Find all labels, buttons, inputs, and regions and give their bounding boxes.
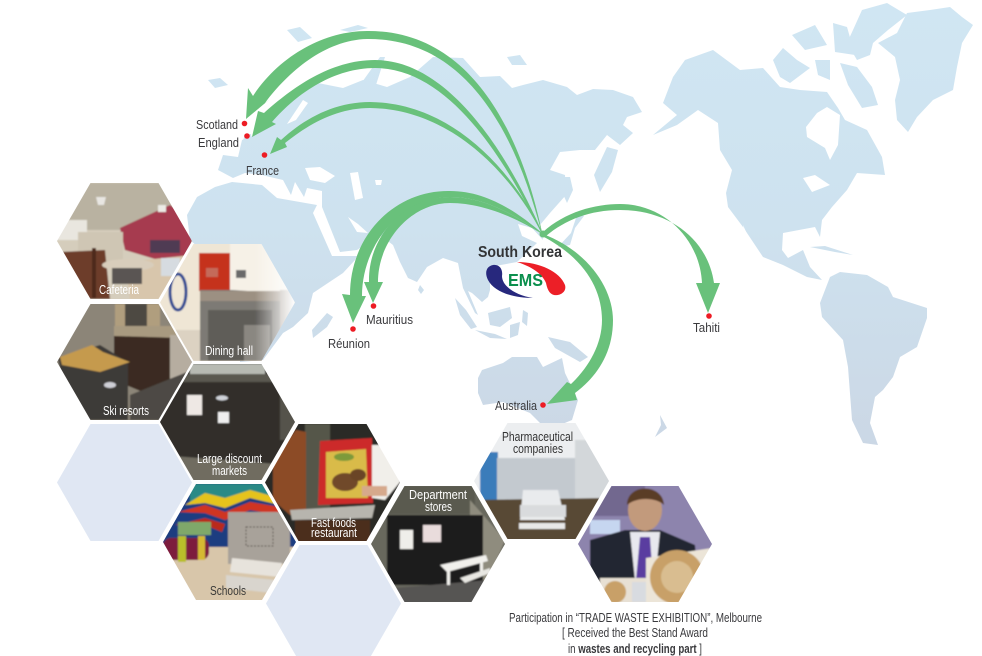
hexagon photo: large discount markets: Large discount bbox=[197, 451, 262, 466]
destination: Scotland: Scotland bbox=[196, 117, 238, 132]
hexagon photo: ski resorts bbox=[55, 302, 195, 422]
arrow: Korea to Reunion bbox=[342, 191, 542, 323]
hexagon photo: dining hall bbox=[158, 242, 298, 364]
destination: Mauritius: Mauritius bbox=[366, 312, 413, 327]
hexagon photo: fast foods restaurant: restaurant bbox=[311, 525, 357, 540]
hexagon photo: cafeteria bbox=[55, 180, 195, 302]
hexagon photo: schools: Schools bbox=[210, 583, 246, 598]
destination: Tahiti bbox=[693, 313, 720, 335]
hexagon photo: fast foods restaurant bbox=[263, 422, 403, 544]
hexagon photo: large discount markets: markets bbox=[212, 463, 247, 478]
destination: Australia: Australia bbox=[495, 398, 538, 413]
destination: Tahiti: Tahiti bbox=[693, 320, 720, 335]
hexagon photo: cafeteria: Cafeteria bbox=[99, 282, 140, 297]
arrow: Korea to France bbox=[270, 102, 542, 234]
hexagon photo: ski resorts: Ski resorts bbox=[103, 403, 149, 418]
hexagon photo: department stores: Department bbox=[409, 487, 467, 502]
destination: Reunion: Réunion bbox=[328, 336, 370, 351]
arrow: Korea to England bbox=[252, 60, 542, 234]
destination: Mauritius bbox=[366, 303, 413, 327]
arrow: Korea to Tahiti bbox=[543, 204, 720, 313]
caption: trade waste exhibition: Participation in “TRADE WASTE EXHIBITION”, Melbourne bbox=[509, 610, 762, 625]
hexagon photo: award at exhibition bbox=[576, 484, 714, 604]
label: South Korea: South Korea bbox=[478, 244, 562, 261]
light hexagon bottom bbox=[266, 545, 401, 656]
hexagon photo: fast foods restaurant: Fast foods bbox=[311, 515, 356, 530]
destination: Reunion bbox=[328, 326, 370, 351]
caption: trade waste exhibition bbox=[509, 610, 762, 656]
hexagon photo: schools bbox=[160, 482, 300, 602]
hexagon photo: pharmaceutical companies: companies bbox=[513, 441, 563, 456]
caption: trade waste exhibition: in wastes and recycling part ] bbox=[568, 641, 702, 656]
destination: England: England bbox=[198, 135, 239, 150]
world map bbox=[187, 3, 973, 445]
logo: EMS bbox=[486, 262, 565, 298]
destination: France: France bbox=[246, 163, 279, 178]
hexagon photo: pharmaceutical companies: Pharmaceutical bbox=[502, 429, 573, 444]
arrow: Korea to Mauritius bbox=[364, 197, 542, 303]
arrow: Korea to Scotland bbox=[246, 31, 542, 234]
arrow: Korea to Australia bbox=[542, 234, 613, 404]
light hexagon left bbox=[57, 424, 192, 541]
hexagon photo: department stores: stores bbox=[425, 499, 452, 514]
logo: EMS: EMS bbox=[508, 270, 543, 290]
origin dot bbox=[540, 230, 546, 238]
destination: France bbox=[246, 152, 279, 178]
hexagon photo: large discount markets bbox=[158, 362, 298, 482]
hexagon photo: dining hall: Dining hall bbox=[205, 343, 253, 358]
caption: trade waste exhibition: [ Received the Best Stand Award bbox=[562, 625, 708, 640]
hexagon photo: department stores bbox=[370, 484, 508, 604]
hexagon photo: pharmaceutical companies bbox=[472, 421, 612, 541]
